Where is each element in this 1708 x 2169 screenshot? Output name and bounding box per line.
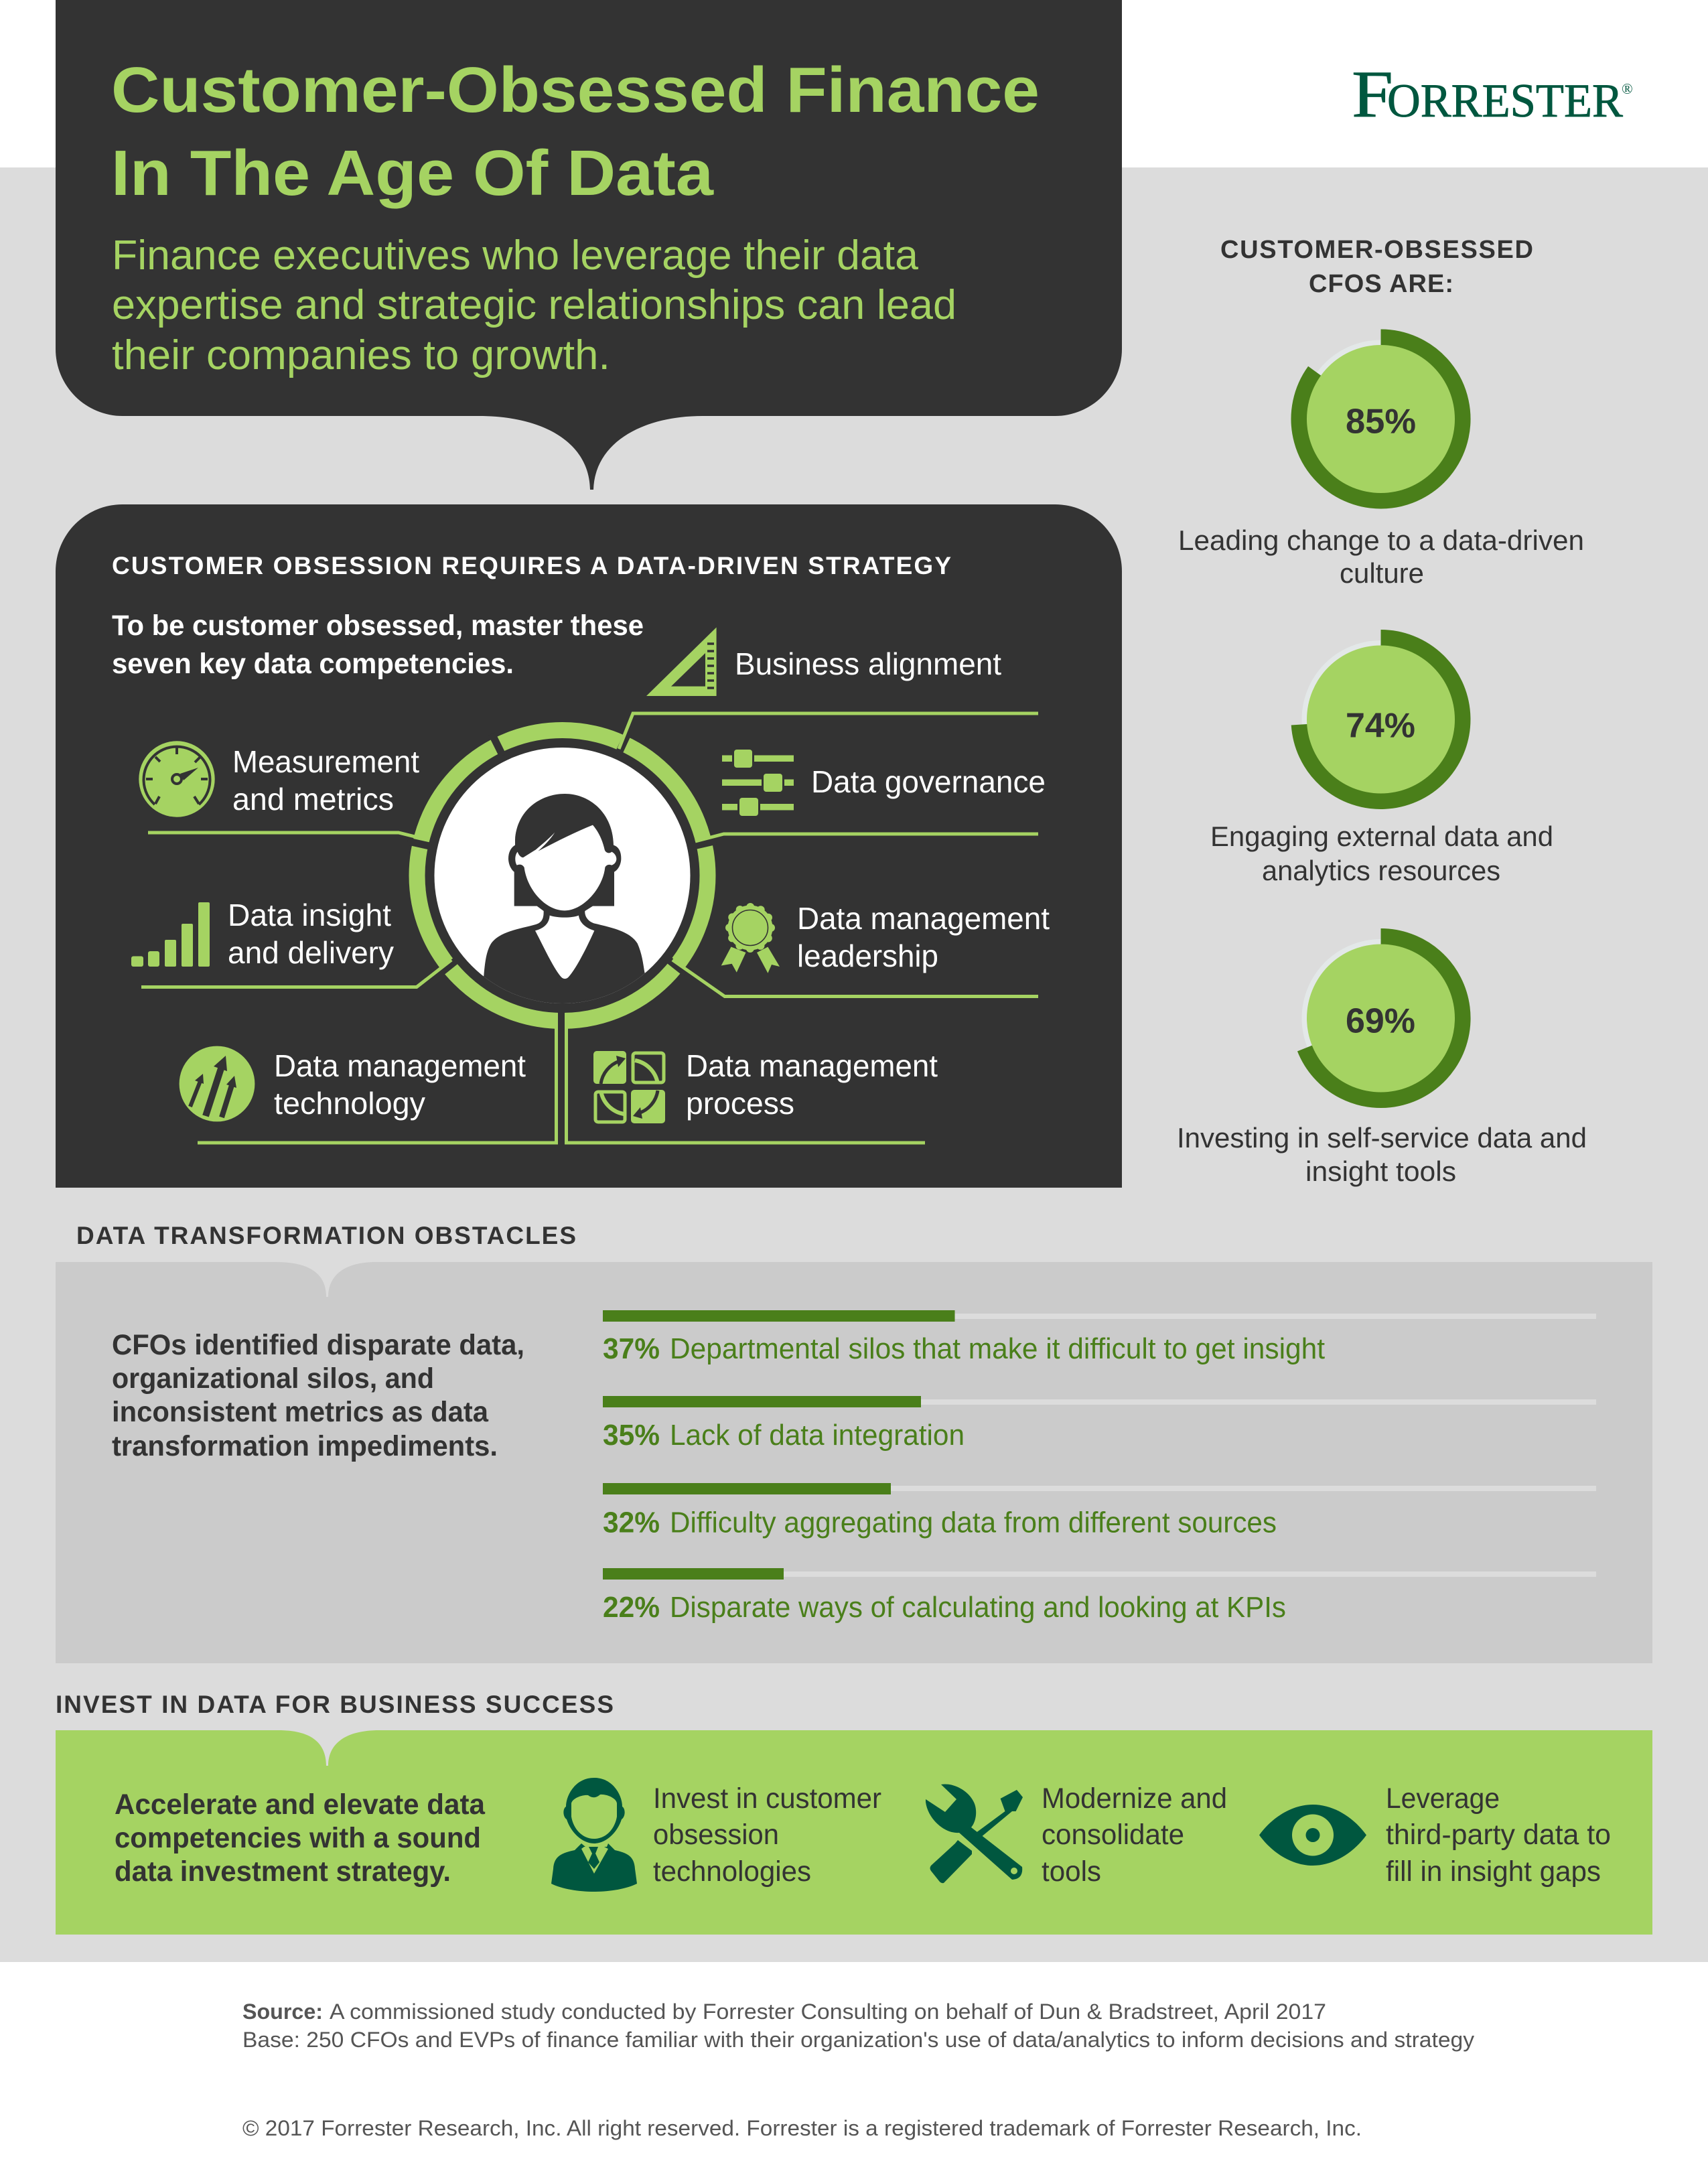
caption: 69%: insight tools bbox=[1305, 1156, 1456, 1187]
text: customer obsession technologies: Invest in customer bbox=[653, 1782, 881, 1815]
panel heading: CUSTOMER OBSESSION REQUIRES A DATA-DRIVEN STRATEGY bbox=[112, 552, 951, 579]
icon: process squares bbox=[593, 1051, 665, 1123]
segmented ring bbox=[408, 730, 716, 1033]
text: third-party data: third-party data to bbox=[1386, 1819, 1611, 1851]
intro text: seven key data competencies. bbox=[112, 648, 514, 680]
bar: 22%: Disparate ways of calculating and looking at KPIs bbox=[670, 1591, 1286, 1624]
icon: wrench and screwdriver bbox=[926, 1784, 1023, 1883]
text: third-party data: Leverage bbox=[1386, 1782, 1500, 1815]
caption: 74%: Engaging external data and bbox=[1210, 821, 1553, 852]
caption: 85%: culture bbox=[1340, 557, 1424, 589]
icon: set square bbox=[646, 627, 717, 696]
text: modernize tools: tools bbox=[1042, 1856, 1101, 1888]
panel: obstacles bbox=[56, 1262, 1652, 1663]
caption: 69% bbox=[1177, 1122, 1587, 1187]
sidebar: customer-obsessed CFOs bbox=[1177, 236, 1587, 1187]
label bbox=[686, 1048, 938, 1121]
icon: businessman bbox=[551, 1778, 637, 1892]
caption: 85% bbox=[1178, 524, 1584, 589]
caption: 74% bbox=[1210, 821, 1553, 886]
subtitle: expertise and strategic relationships can lead bbox=[112, 282, 956, 328]
label bbox=[274, 1048, 526, 1121]
text: modernize tools bbox=[1042, 1782, 1227, 1888]
bar: 37% bbox=[603, 1310, 1596, 1365]
caption: 85%: Leading change to a data-driven bbox=[1178, 524, 1584, 556]
obstacles summary: transformation impediments. bbox=[112, 1430, 498, 1462]
heading: invest in data: INVEST IN DATA FOR BUSINESS SUCCESS bbox=[56, 1691, 614, 1718]
competency: data management process bbox=[593, 1048, 938, 1123]
label: Business alignment bbox=[735, 646, 1001, 681]
intro text bbox=[112, 610, 644, 680]
label: Data governance bbox=[811, 764, 1046, 799]
title: In The Age Of Data bbox=[111, 137, 714, 209]
label: technology bbox=[274, 1086, 425, 1121]
invest summary bbox=[115, 1789, 486, 1888]
text: third-party data bbox=[1386, 1782, 1611, 1888]
obstacles summary: organizational silos, and bbox=[112, 1362, 434, 1395]
donut: 74%: 74% bbox=[1346, 706, 1415, 745]
label: Data management bbox=[686, 1048, 938, 1083]
bar: 37%: 37% bbox=[603, 1332, 660, 1365]
obstacles summary: CFOs identified disparate data, bbox=[112, 1329, 524, 1361]
obstacles summary bbox=[112, 1329, 524, 1462]
bar: 32% bbox=[603, 1483, 1596, 1539]
source note bbox=[242, 2000, 1474, 2052]
icon: eye bbox=[1259, 1805, 1366, 1866]
text: modernize tools: Modernize and bbox=[1042, 1782, 1227, 1815]
label bbox=[797, 901, 1050, 973]
copyright: © 2017 Forrester Research, Inc. All right reserved. Forrester is a registered trademark of Forrester Research, Inc. bbox=[242, 2116, 1362, 2140]
label: and delivery bbox=[228, 935, 394, 970]
logo: Forrester: F bbox=[1352, 57, 1393, 131]
competency: business alignment bbox=[646, 627, 1001, 696]
label: leadership bbox=[797, 938, 938, 973]
obstacles summary: inconsistent metrics as data bbox=[112, 1396, 489, 1428]
text: customer obsession technologies: obsession bbox=[653, 1819, 779, 1851]
competency: data governance bbox=[722, 750, 1046, 816]
label: Data insight bbox=[228, 898, 391, 932]
donut: 85%: 85% bbox=[1346, 402, 1416, 441]
bar: 35%: 35% bbox=[603, 1419, 660, 1452]
title bbox=[111, 54, 1040, 209]
label bbox=[228, 898, 394, 970]
competency: measurement and metrics bbox=[139, 741, 419, 817]
sidebar heading: CFOS ARE: bbox=[1309, 270, 1453, 298]
icon: bars bbox=[131, 902, 210, 967]
label: Data management bbox=[274, 1048, 526, 1083]
label: Measurement bbox=[232, 744, 419, 779]
subtitle: Finance executives who leverage their data bbox=[112, 232, 919, 279]
text: customer obsession technologies: technologies bbox=[653, 1856, 811, 1888]
sidebar heading: CUSTOMER-OBSESSED bbox=[1220, 236, 1533, 264]
text: customer obsession technologies bbox=[653, 1782, 881, 1888]
bar: 35% bbox=[603, 1396, 1596, 1452]
competency: data management technology bbox=[180, 1046, 526, 1121]
header speech bubble bbox=[56, 0, 1122, 490]
bar: 37%: Departmental silos that make it difficult to get insight bbox=[670, 1332, 1325, 1365]
label: and metrics bbox=[232, 782, 394, 817]
text: modernize tools: consolidate bbox=[1042, 1819, 1184, 1851]
connector lines bbox=[141, 713, 1038, 1143]
icon: gauge bbox=[139, 741, 215, 817]
invest summary: competencies with a sound bbox=[115, 1822, 481, 1854]
source note: Source: bbox=[242, 2000, 323, 2024]
source note: A commissioned study conducted by Forrester Consulting on behalf of Dun & Bradstreet, April 2017 bbox=[330, 2000, 1326, 2024]
label: process bbox=[686, 1086, 794, 1121]
logo: Forrester: ORRESTER bbox=[1387, 75, 1624, 127]
donut: 69% bbox=[1302, 936, 1463, 1100]
bar: 32%: 32% bbox=[603, 1506, 660, 1539]
donut: 74% bbox=[1299, 638, 1462, 801]
caption: 69%: Investing in self-service data and bbox=[1177, 1122, 1587, 1153]
invest summary: Accelerate and elevate data bbox=[115, 1789, 486, 1821]
logo: Forrester bbox=[1352, 57, 1633, 131]
donut: 69%: 69% bbox=[1346, 1002, 1415, 1041]
competency: data insight and delivery bbox=[131, 898, 394, 970]
sidebar heading bbox=[1220, 236, 1533, 298]
intro text: To be customer obsessed, master these bbox=[112, 610, 644, 642]
label bbox=[232, 744, 419, 817]
invest summary: data investment strategy. bbox=[115, 1856, 451, 1888]
bar: 22% bbox=[603, 1568, 1596, 1624]
icon: woman portrait bbox=[434, 748, 690, 1023]
icon: sliders bbox=[722, 750, 794, 816]
bar: 22%: 22% bbox=[603, 1591, 660, 1624]
donut: 85% bbox=[1299, 338, 1463, 501]
panel: data competencies bbox=[56, 504, 1122, 1188]
panel: invest in data bbox=[56, 1730, 1652, 1935]
label: Data management bbox=[797, 901, 1050, 936]
heading: data transformation obstacles: DATA TRANSFORMATION OBSTACLES bbox=[76, 1222, 576, 1249]
text: third-party data: fill in insight gaps bbox=[1386, 1856, 1601, 1888]
bar: 35%: Lack of data integration bbox=[670, 1419, 965, 1452]
logo: Forrester: ® bbox=[1622, 80, 1633, 97]
competency: data management leadership bbox=[721, 901, 1050, 973]
source note: Base: 250 CFOs and EVPs of finance familiar with their organization's use of data/analytics to inform decisions and strategy bbox=[242, 2028, 1474, 2052]
bar: 32%: Difficulty aggregating data from different sources bbox=[670, 1506, 1277, 1539]
title: Customer-Obsessed Finance bbox=[111, 54, 1040, 126]
caption: 74%: analytics resources bbox=[1262, 855, 1500, 886]
icon: rosette bbox=[721, 906, 780, 973]
subtitle: their companies to growth. bbox=[112, 332, 610, 378]
icon: arrows circle bbox=[180, 1046, 255, 1121]
subtitle bbox=[112, 232, 956, 378]
